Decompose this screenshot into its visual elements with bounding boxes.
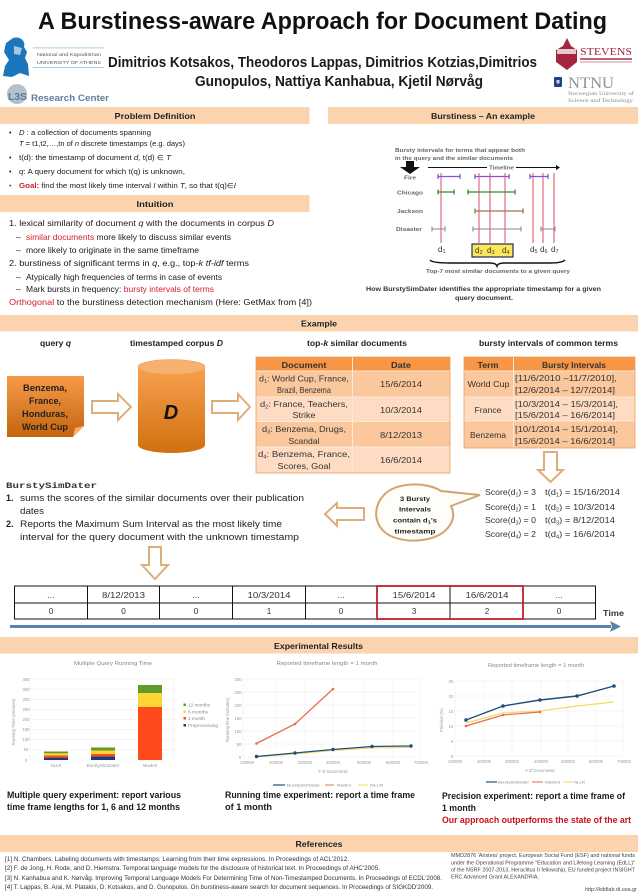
- logo: University of Athens: [3, 38, 104, 77]
- timeline table: 10/3/2014: [248, 591, 291, 600]
- chart: multiple query running time: 1 month: [188, 716, 206, 721]
- chart: precision vs documents: Reported timeframe length = 1 month: [488, 663, 584, 669]
- chart: precision vs documents: 25: [449, 679, 454, 684]
- highlighted interval: [377, 586, 523, 619]
- chart: running time vs documents: MaxEnt: [337, 782, 352, 788]
- table: top-k documents: Brazil, Benzema: [277, 386, 331, 395]
- figure: bursty intervals timeline: d: [540, 245, 544, 254]
- timeline table: 16/6/2014: [466, 591, 509, 600]
- heading: experimental results: [0, 637, 638, 654]
- callout: 3 bursty intervals: ’s: [431, 518, 437, 524]
- callout: 3 bursty intervals: contain d: [393, 518, 423, 524]
- query note: Benzema,: [23, 383, 67, 393]
- figure: bursty intervals timeline: d: [475, 246, 479, 255]
- scores list: [485, 487, 620, 540]
- logo: NTNU: [554, 75, 635, 104]
- figure: bursty intervals timeline: d: [551, 245, 555, 254]
- heading: intuition: Intuition: [136, 199, 174, 209]
- chart: multiple query running time: 250: [22, 707, 30, 712]
- intuition list: –: [16, 272, 21, 282]
- table: top-k documents: 15/6/2014: [380, 380, 422, 389]
- algorithm description: 2.: [6, 519, 14, 529]
- intuition list: similar documents more likely to discuss similar events: [26, 232, 231, 242]
- chart: precision vs documents: MaxEnt: [545, 780, 561, 784]
- funding note: under the Operational Programme "Education and Lifelong Learning (EdLL)": [451, 860, 635, 866]
- chart: precision vs documents: Precision (%): [439, 707, 444, 732]
- figure: bursty intervals timeline: 2: [479, 250, 483, 256]
- chart: precision vs documents: 10: [449, 724, 454, 729]
- panel: problem definition: [0, 107, 310, 190]
- arrow: intervals to scores: [538, 452, 563, 482]
- chart: precision vs documents: 300000: [505, 759, 520, 764]
- chart: multiple query running time: Preprocessing: [188, 723, 219, 728]
- table: top-k documents: 2: [265, 404, 269, 410]
- table: bursty intervals: [10/1/2014 – 15/1/2014],: [515, 425, 618, 434]
- scores list: 1: [515, 492, 519, 498]
- chart: multiple query running time: Running Time (minutes): [11, 698, 16, 746]
- chart: precision vs documents: 20: [449, 694, 454, 699]
- table: top-k documents: : Benzema, France,: [267, 450, 350, 459]
- chart: multiple query running time: BurstySimDater: [86, 763, 120, 768]
- algorithm description: interval for the query document with the unknown timestamp: [20, 532, 299, 542]
- problem definition list: •: [9, 130, 12, 137]
- scores list: t(d: [545, 502, 555, 512]
- panel: intuition: [0, 195, 312, 307]
- chart: running time vs documents: [225, 661, 429, 788]
- reference list: [2] F. de Jong, H. Rode, and D. Hiemstra. Temporal language models for the disclosure of historical text. In Proceedings of AHC'2005.: [5, 865, 380, 872]
- scores list: t(d: [545, 487, 555, 497]
- reference list: [3] N. Kanhabua and K. Nørvåg. Improving Temporal Language Models For Determining Time of Non-Timestamped Documents. In Proceedings of ECDL'2008.: [5, 874, 442, 882]
- captions: experiments: Running time experiment: report a time frame: [225, 790, 415, 800]
- timeline table: 3: [412, 607, 417, 616]
- chart: running time vs documents: 600000: [386, 760, 401, 765]
- logo: L3S Research Center: Research Center: [31, 93, 109, 104]
- algorithm description: sums the scores of the similar documents over their publication: [20, 493, 304, 503]
- chart: running time vs documents: 100000: [240, 760, 255, 765]
- scores list: 3: [515, 520, 519, 526]
- authors: Gunopulos, Nattiya Kanhabua, Kjetil Nørvåg: [195, 74, 483, 90]
- chart: running time vs documents: # of Documents: [318, 769, 348, 774]
- logo: Stevens: STEVENS: [580, 47, 632, 58]
- algorithm description: Reports the Maximum Sum Interval as the most likely time: [20, 519, 282, 529]
- funding note: ERC Advanced Grant ALEXANDRIA.: [451, 874, 539, 880]
- figure: bursty intervals timeline: Jackson: [397, 209, 424, 215]
- scores list: Score(d: [485, 502, 514, 512]
- callout: 3 bursty intervals: 1: [428, 520, 431, 526]
- captions: experiments: Our approach outperforms the state of the art: [442, 815, 631, 825]
- heading: problem definition: [0, 107, 310, 124]
- intuition list: –: [16, 284, 21, 294]
- timeline table: 15/6/2014: [392, 591, 436, 600]
- figure: bursty intervals timeline: 5: [534, 249, 538, 255]
- panel: example: [0, 315, 638, 632]
- scores list: ) = 10/3/2014: [559, 502, 615, 512]
- chart: precision vs documents: NLLR: [574, 780, 585, 784]
- table: top-k documents: Scores, Goal: [278, 462, 331, 471]
- intuition list: 2. burstiness of significant terms in q, e.g., top- k tf-idf terms: [9, 258, 249, 268]
- table: top-k documents: Date: [391, 361, 411, 370]
- intuition list: Orthogonal to the burstiness detection mechanism (Here: GetMax from [4]): [9, 297, 312, 307]
- chart: precision vs documents: 0: [451, 754, 454, 759]
- scores list: Score(d: [485, 529, 514, 539]
- table: top-k documents: : World Cup, France,: [267, 374, 349, 384]
- figure: bursty intervals timeline: d: [487, 246, 491, 255]
- scores list: 1: [556, 492, 559, 498]
- reference list: [5, 856, 442, 891]
- timeline table: 0: [194, 607, 199, 616]
- chart: multiple query running time: 6 months: [188, 710, 208, 714]
- heading: experimental results: Experimental Results: [274, 641, 363, 651]
- callout: 3 bursty intervals: timestamp: [394, 528, 436, 536]
- chart: multiple query running time: Multiple Query Running Time: [74, 661, 152, 667]
- logo: L3S Research Center: [7, 84, 109, 104]
- reference list: [1] N. Chambers. Labeling documents with timestamps: Learning from their time expressions. In Proceedings of ACL'2012.: [5, 856, 349, 863]
- table: top-k documents: : Benzema, Drugs,: [270, 425, 346, 434]
- table: bursty intervals: [10/3/2014 – 15/3/2014],: [515, 400, 618, 409]
- table: top-k documents: Document: [282, 361, 327, 370]
- chart: running time vs documents: 50: [237, 742, 242, 747]
- timeline table: …: [192, 591, 200, 600]
- chart: running time vs documents: 300000: [298, 760, 313, 765]
- chart: multiple query running time: 50: [24, 747, 29, 752]
- chart: multiple query running time: NLLR: [51, 763, 61, 768]
- figure: bursty intervals timeline: Disaster: [396, 227, 423, 233]
- callout: 3 bursty intervals: 3 Bursty: [400, 496, 430, 503]
- chart: running time vs documents: 500000: [357, 760, 372, 765]
- cylinder: corpus D: D: [164, 402, 178, 424]
- table: top-k documents: d: [260, 400, 265, 409]
- timeline table: 0: [557, 607, 562, 616]
- query note: World Cup: [22, 422, 69, 432]
- timeline table: 1: [267, 607, 272, 616]
- chart: running time vs documents: Running time (minutes): [225, 697, 230, 742]
- problem definition list: [9, 128, 236, 190]
- arrow: callout to algorithm: [325, 503, 364, 526]
- chart: multiple query running time: 400: [22, 677, 30, 682]
- logo: University of Athens: UNIVERSITY OF ATHENS: [37, 60, 101, 65]
- chart: running time vs documents: 150: [234, 716, 242, 721]
- table: top-k documents: [256, 357, 450, 473]
- table: top-k documents: Strike: [292, 411, 316, 420]
- heading: example: Example: [301, 318, 337, 328]
- chart: multiple query running time: 350: [22, 687, 30, 692]
- scores list: ) = 2: [518, 529, 536, 539]
- column labels: bursty intervals of common terms: [479, 339, 619, 348]
- table: bursty intervals: [12/6/2014 – 12/7/2014]: [515, 386, 615, 395]
- algorithm description: [6, 481, 304, 542]
- callout: 3 bursty intervals: Intervals: [399, 506, 431, 514]
- logo: University of Athens: National and Kapodistrian: [37, 52, 102, 57]
- table: bursty intervals: [15/6/2014 – 16/6/2014]: [515, 437, 615, 446]
- heading: references: [0, 835, 638, 852]
- figure: bursty intervals timeline: Bursty intervals for terms that appear both: [395, 148, 526, 154]
- problem definition list: t(d): the timestamp of document d, t(d) ∈ T: [19, 153, 172, 162]
- table: top-k documents: 1: [264, 379, 267, 385]
- problem definition list: D : a collection of documents spanning: [19, 128, 151, 137]
- table: top-k documents: d: [262, 425, 267, 434]
- scores list: ) = 3: [518, 487, 536, 497]
- chart: precision vs documents: 400000: [534, 759, 549, 764]
- chart: multiple query running time: 12 months: [188, 702, 210, 708]
- timeline table: …: [555, 591, 563, 600]
- intuition list: –: [16, 245, 21, 255]
- chart: running time vs documents: BurstySimDater: [287, 782, 321, 788]
- intuition list: 1. lexical similarity of document q with the documents in corpus D: [9, 218, 274, 228]
- chart: precision vs documents: 100000: [448, 759, 463, 764]
- problem definition list: q: A query document for which t(q) is unknown,: [19, 167, 185, 176]
- heading: burstiness example: [328, 107, 638, 124]
- label: time: Time: [603, 609, 625, 618]
- timeline table: 0: [121, 607, 126, 616]
- column labels: top-k similar documents: [307, 339, 408, 348]
- chart: running time vs documents: 200: [234, 703, 242, 708]
- scores list: ) = 0: [518, 515, 536, 525]
- intuition list: Atypically high frequencies of terms in case of events: [26, 272, 222, 282]
- captions: experiments: time frame lengths for 1, 6 and 12 months: [7, 802, 180, 812]
- algorithm description: BurstySimDater: [6, 481, 97, 491]
- figure: bursty intervals timeline: Fire: [404, 176, 416, 182]
- problem definition list: •: [9, 169, 12, 176]
- chart: multiple query running time: 200: [22, 717, 30, 722]
- arrow: time axis: [10, 621, 621, 632]
- chart: multiple query running time: 100: [22, 737, 30, 742]
- callout: 3 bursty intervals: [376, 484, 480, 541]
- chart: running time vs documents: 0: [239, 755, 242, 760]
- problem definition list: Goal: find the most likely time interval I within T, so that t(q)∈ I: [19, 181, 236, 190]
- chart: running time vs documents: 700000: [414, 760, 429, 765]
- figure: bursty intervals timeline: d: [530, 245, 534, 254]
- scores list: ) = 8/12/2014: [559, 515, 615, 525]
- figure caption: [366, 286, 601, 302]
- panel: experimental results: [0, 637, 638, 825]
- scores list: 3: [556, 520, 559, 526]
- chart: precision vs documents: # of Documents: [525, 768, 555, 773]
- timeline table: 0: [49, 607, 54, 616]
- logo: NTNU: Norwegian University of: [568, 92, 635, 97]
- figure: bursty intervals timeline: [395, 148, 571, 275]
- captions: experiments: Multiple query experiment: report various: [7, 790, 181, 800]
- table: top-k documents: 4: [263, 454, 267, 460]
- figure: bursty intervals timeline: in the query and the similar documents: [395, 156, 513, 162]
- arrow: query to corpus: [92, 394, 131, 420]
- chart: multiple query running time: 300: [22, 697, 30, 702]
- chart: running time vs documents: 250: [234, 690, 242, 695]
- heading: intuition: [0, 195, 310, 212]
- scores list: t(d: [545, 515, 555, 525]
- figure: bursty intervals timeline: d: [502, 246, 506, 255]
- table: top-k documents: 8/12/2013: [380, 431, 422, 440]
- scores list: Score(d: [485, 487, 514, 497]
- scores list: 2: [515, 508, 519, 514]
- heading: references: References: [296, 839, 343, 849]
- figure: bursty intervals timeline: 7: [555, 249, 559, 255]
- cylinder: corpus D: [138, 360, 205, 453]
- authors: Dimitrios Kotsakos, Theodoros Lappas, Dimitrios Kotzias,Dimitrios: [108, 55, 537, 71]
- chart: running time vs documents: 400000: [326, 760, 341, 765]
- intuition list: more likely to originate in the same timeframe: [26, 245, 199, 255]
- chart: precision vs documents: 500000: [561, 759, 576, 764]
- table: bursty intervals: [15/6/2014 – 16/6/2014]: [515, 411, 615, 420]
- figure: bursty intervals timeline: 3: [491, 250, 495, 256]
- arrow: algorithm to timeline: [142, 547, 168, 579]
- logo: NTNU: NTNU: [568, 75, 614, 92]
- table: bursty intervals: [464, 357, 635, 448]
- captions: experiments: Precision experiment: report a time frame of: [442, 791, 626, 801]
- chart: precision vs documents: 200000: [477, 759, 492, 764]
- table: top-k documents: d: [259, 374, 264, 384]
- timeline table: …: [337, 591, 345, 600]
- column labels: [40, 339, 619, 348]
- chart: running time vs documents: Reported timeframe length = 1 month: [276, 661, 378, 667]
- query note: France,: [29, 396, 61, 406]
- column labels: timestamped corpus D: [130, 339, 223, 348]
- chart: precision vs documents: [439, 663, 632, 784]
- captions: experiments: of 1 month: [225, 802, 272, 812]
- figure caption: query document.: [455, 295, 513, 302]
- intuition list: –: [16, 232, 21, 242]
- logo: NTNU: Science and Technology: [568, 99, 634, 104]
- chart: running time vs documents: 200000: [269, 760, 284, 765]
- logo: L3S Research Center: L3S: [8, 92, 27, 103]
- reference list: [4] T. Lappas, B. Arai, M. Platakis, D. Kotsakos, and D. Gunopulos. On burstiness-aware search for document sequences. In Proceedings of SIGKDD'2009.: [5, 884, 433, 891]
- title: A Burstiness-aware Approach for Document Dating: [38, 8, 607, 35]
- table: bursty intervals: World Cup: [468, 380, 510, 389]
- figure: bursty intervals timeline: 6: [544, 249, 548, 255]
- table: bursty intervals: Bursty Intervals: [542, 361, 606, 370]
- algorithm description: dates: [20, 506, 45, 516]
- chart: precision vs documents: 600000: [589, 759, 604, 764]
- scores list: ) = 16/6/2014: [559, 529, 615, 539]
- figure: bursty intervals timeline: Timeline: [489, 166, 514, 172]
- chart: multiple query running time: MaxEnt: [143, 763, 158, 768]
- chart: running time vs documents: 300: [234, 677, 242, 682]
- chart: multiple query running time: 150: [22, 727, 30, 732]
- table: top-k documents: 3: [267, 430, 270, 436]
- table: bursty intervals: France: [474, 406, 502, 415]
- captions: experiments: 1 month: [442, 803, 476, 813]
- funding note: of the NSRF 2007-2013, Heraclitus II fellowship, EU funded project INSIGHT: [451, 868, 636, 874]
- figure: bursty intervals timeline: 4: [506, 250, 510, 256]
- logo: Stevens: [556, 38, 632, 70]
- column labels: query q: [40, 339, 71, 348]
- table: top-k documents: : France, Teachers,: [268, 400, 348, 409]
- url: http://kddlab.di.uoa.gr: [585, 887, 637, 893]
- chart: multiple query running time: [11, 661, 219, 768]
- figure: bursty intervals timeline: 1: [442, 249, 446, 255]
- funding note: [451, 853, 636, 880]
- authors: [108, 55, 537, 90]
- chart: precision vs documents: 700000: [617, 759, 632, 764]
- panel: references: [0, 835, 638, 893]
- intuition list: [9, 218, 312, 307]
- timeline table: 2: [485, 607, 490, 616]
- figure: bursty intervals timeline: d: [438, 245, 442, 254]
- scores list: ) = 1: [518, 502, 536, 512]
- heading: burstiness example: Burstiness – An example: [431, 111, 535, 121]
- scores list: 4: [515, 534, 519, 540]
- chart: running time vs documents: NLLR: [370, 782, 383, 788]
- heading: problem definition: Problem Definition: [114, 111, 196, 121]
- figure: bursty intervals timeline: Top-7 most similar documents to a given query: [426, 269, 571, 275]
- table: top-k documents: Scandal: [288, 437, 320, 446]
- algorithm description: 1.: [6, 493, 14, 503]
- intuition list: Mark bursts in frequency: bursty intervals of terms: [26, 284, 214, 294]
- scores list: Score(d: [485, 515, 514, 525]
- problem definition list: T = t1,t2,…,tn of n discrete timestamps (e.g. days): [19, 139, 185, 148]
- table: bursty intervals: Term: [478, 361, 498, 370]
- scores list: 2: [556, 508, 559, 514]
- scores list: t(d: [545, 529, 555, 539]
- timeline table: 8/12/2013: [102, 591, 146, 600]
- figure caption: How BurstySimDater identifies the appropriate timestamp for a given: [366, 286, 601, 293]
- captions: experiments: [7, 790, 631, 825]
- heading: example: [0, 315, 638, 332]
- table: bursty intervals: Benzema: [470, 431, 506, 440]
- figure: bursty intervals timeline: Chicago: [397, 190, 424, 196]
- scores list: ) = 15/16/2014: [559, 487, 620, 497]
- problem definition list: •: [9, 155, 12, 162]
- chart: multiple query running time: 0: [25, 758, 28, 763]
- table: top-k documents: d: [258, 450, 263, 459]
- problem definition list: •: [9, 183, 12, 190]
- timeline table: …: [47, 591, 55, 600]
- table: top-k documents: 16/6/2014: [380, 456, 422, 465]
- scores list: 4: [556, 534, 559, 540]
- table: top-k documents: 10/3/2014: [380, 406, 422, 415]
- timeline table: [14, 586, 596, 619]
- arrow: corpus to documents: [212, 394, 250, 420]
- table: bursty intervals: [11/6/2010 –11/7/2010],: [515, 374, 617, 383]
- chart: precision vs documents: BurstySimDater: [498, 780, 530, 784]
- chart: running time vs documents: 100: [234, 729, 242, 734]
- chart: precision vs documents: 5: [451, 739, 454, 744]
- panel: burstiness example: [328, 107, 638, 302]
- timeline table: 0: [339, 607, 344, 616]
- funding note: MMD2876 'Aristeia' project, European Social Fund (ESF) and national funds: [451, 853, 635, 859]
- query note: Honduras,: [22, 409, 68, 419]
- query note: [7, 376, 84, 437]
- chart: precision vs documents: 15: [449, 709, 454, 714]
